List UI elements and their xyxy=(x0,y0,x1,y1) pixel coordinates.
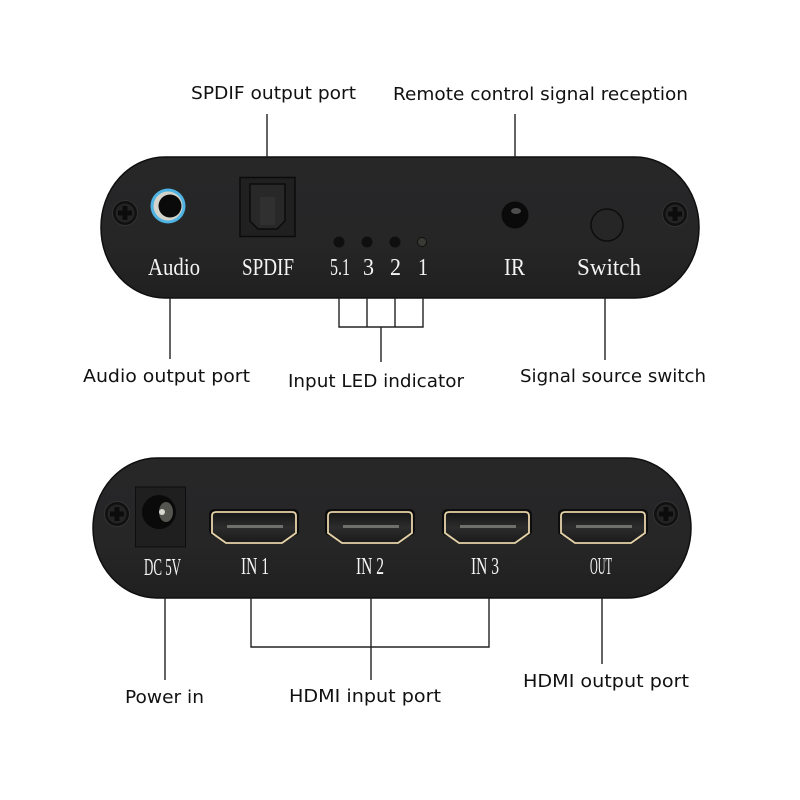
heading: HDMI output port: HDMI output port xyxy=(523,671,689,692)
icon: LED indicators xyxy=(334,236,426,248)
arrow: power leader xyxy=(164,598,166,680)
arrow: LED bracket xyxy=(339,298,423,362)
arrow: audio leader xyxy=(169,298,171,359)
icon: left screw rear xyxy=(104,502,130,526)
device print: 5.1: 5.1 xyxy=(330,255,350,281)
heading: HDMI input port: HDMI input port xyxy=(289,686,441,707)
icon: switch button xyxy=(591,209,623,241)
icon: IR receiver xyxy=(502,202,528,228)
device print: 2: 2 xyxy=(390,255,401,281)
icon: audio jack xyxy=(150,188,186,224)
heading: SPDIF output port: SPDIF output port xyxy=(191,83,356,104)
panel: bottom device rear view: OUT xyxy=(590,554,612,580)
icon: right screw rear xyxy=(654,502,678,526)
heading: Remote control signal reception: Remote control signal reception xyxy=(393,84,688,105)
icon: HDMI OUT xyxy=(558,509,648,543)
icon: right screw xyxy=(662,202,688,226)
icon: SPDIF optical port xyxy=(240,178,295,236)
panel: bottom device rear view xyxy=(93,458,691,598)
device print: 3: 3 xyxy=(363,255,374,281)
arrow: HDMI input bracket xyxy=(251,598,489,680)
icon: HDMI IN 3 xyxy=(442,509,532,543)
arrow: HDMI output leader xyxy=(601,598,603,664)
device print: IR: IR xyxy=(504,255,525,281)
icon: left screw xyxy=(112,200,138,226)
arrow: remote leader xyxy=(514,114,516,157)
device print: IN 3: IN 3 xyxy=(471,554,499,580)
heading: Signal source switch: Signal source switch xyxy=(520,366,706,387)
device print: Audio: Audio xyxy=(148,255,200,281)
device print: Switch: Switch xyxy=(577,255,641,281)
device print: IN 2: IN 2 xyxy=(356,554,384,580)
heading: Input LED indicator: Input LED indicator xyxy=(288,371,465,392)
device print: SPDIF: SPDIF xyxy=(242,255,294,281)
device print: 1: 1 xyxy=(418,255,428,281)
device print: IN 1: IN 1 xyxy=(241,554,269,580)
heading: Audio output port: Audio output port xyxy=(83,366,250,387)
icon: HDMI IN 1 xyxy=(209,509,299,543)
icon: DC power jack xyxy=(136,487,186,547)
device print: DC 5V: DC 5V xyxy=(144,555,181,581)
heading: Power in: Power in xyxy=(125,687,204,708)
arrow: switch leader xyxy=(604,298,606,360)
arrow: SPDIF leader xyxy=(266,114,268,157)
icon: HDMI IN 2 xyxy=(325,509,415,543)
panel: top device front view xyxy=(101,157,699,298)
